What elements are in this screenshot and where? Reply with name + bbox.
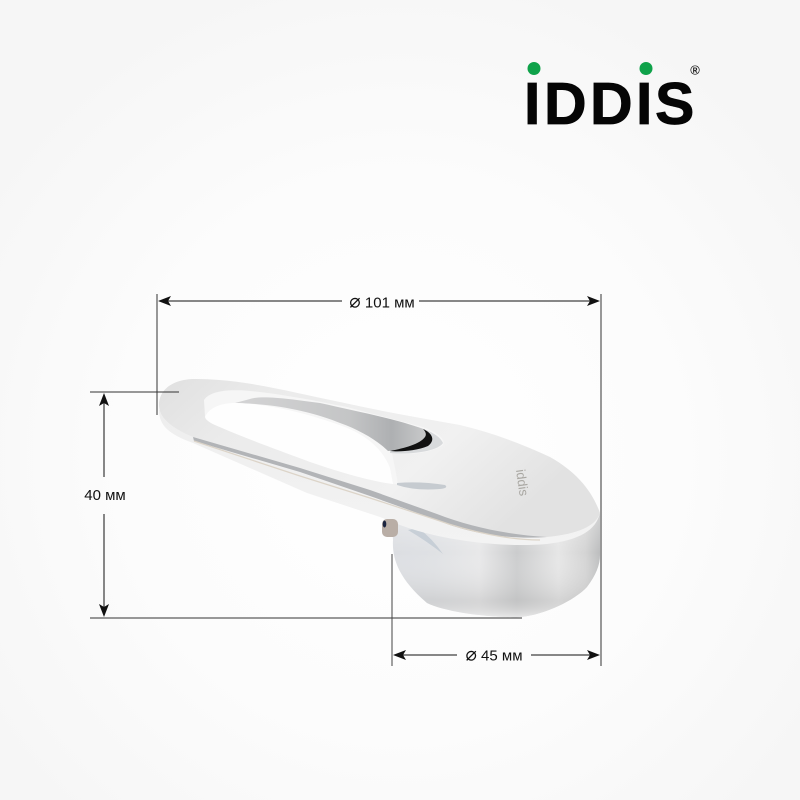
dimension line with gap — [395, 654, 598, 656]
inner rim highlight — [204, 390, 444, 484]
extension line left — [391, 554, 393, 666]
dimension: diameter 45 mm — [392, 554, 600, 666]
handle base cylinder — [392, 500, 600, 617]
extension line left — [156, 294, 158, 415]
reflection under opening — [397, 482, 446, 490]
extension line top — [90, 391, 179, 393]
arrowheads — [158, 296, 600, 306]
base highlight — [408, 528, 443, 554]
logo green dot right — [640, 62, 652, 75]
extension line right — [600, 294, 602, 666]
recess halo — [390, 424, 443, 454]
dimension: diameter 101 mm — [157, 290, 601, 666]
base vertical shading — [392, 500, 600, 617]
handle lower bevel — [159, 410, 600, 545]
dimension: height 40 mm — [84, 392, 522, 618]
label: ⌀ 101 мм — [349, 290, 415, 312]
logo: IDDIS — [524, 62, 700, 137]
label: 40 мм — [84, 487, 126, 504]
arrowheads — [99, 393, 109, 617]
engraved logo on handle: iddis — [513, 468, 532, 497]
label: ⌀ 45 мм — [465, 644, 523, 666]
registered mark: ® — [690, 62, 700, 78]
product: chrome faucet lever handle — [159, 379, 600, 617]
pin dark hole — [383, 520, 386, 528]
pivot pin — [382, 519, 398, 537]
logo wordmark: IDDIS — [524, 71, 694, 137]
handle opening — [205, 403, 393, 484]
extension line bottom — [90, 617, 522, 619]
recess dark reflection — [390, 429, 432, 451]
arrowheads — [393, 650, 600, 660]
chrome edge reflection — [193, 437, 547, 538]
logo green dot left — [528, 62, 540, 75]
warm edge line — [194, 441, 540, 540]
recess shaded wall — [235, 397, 426, 451]
dimension line with gap — [160, 300, 598, 302]
dimension line with gap — [103, 395, 105, 615]
handle top surface — [159, 379, 600, 537]
